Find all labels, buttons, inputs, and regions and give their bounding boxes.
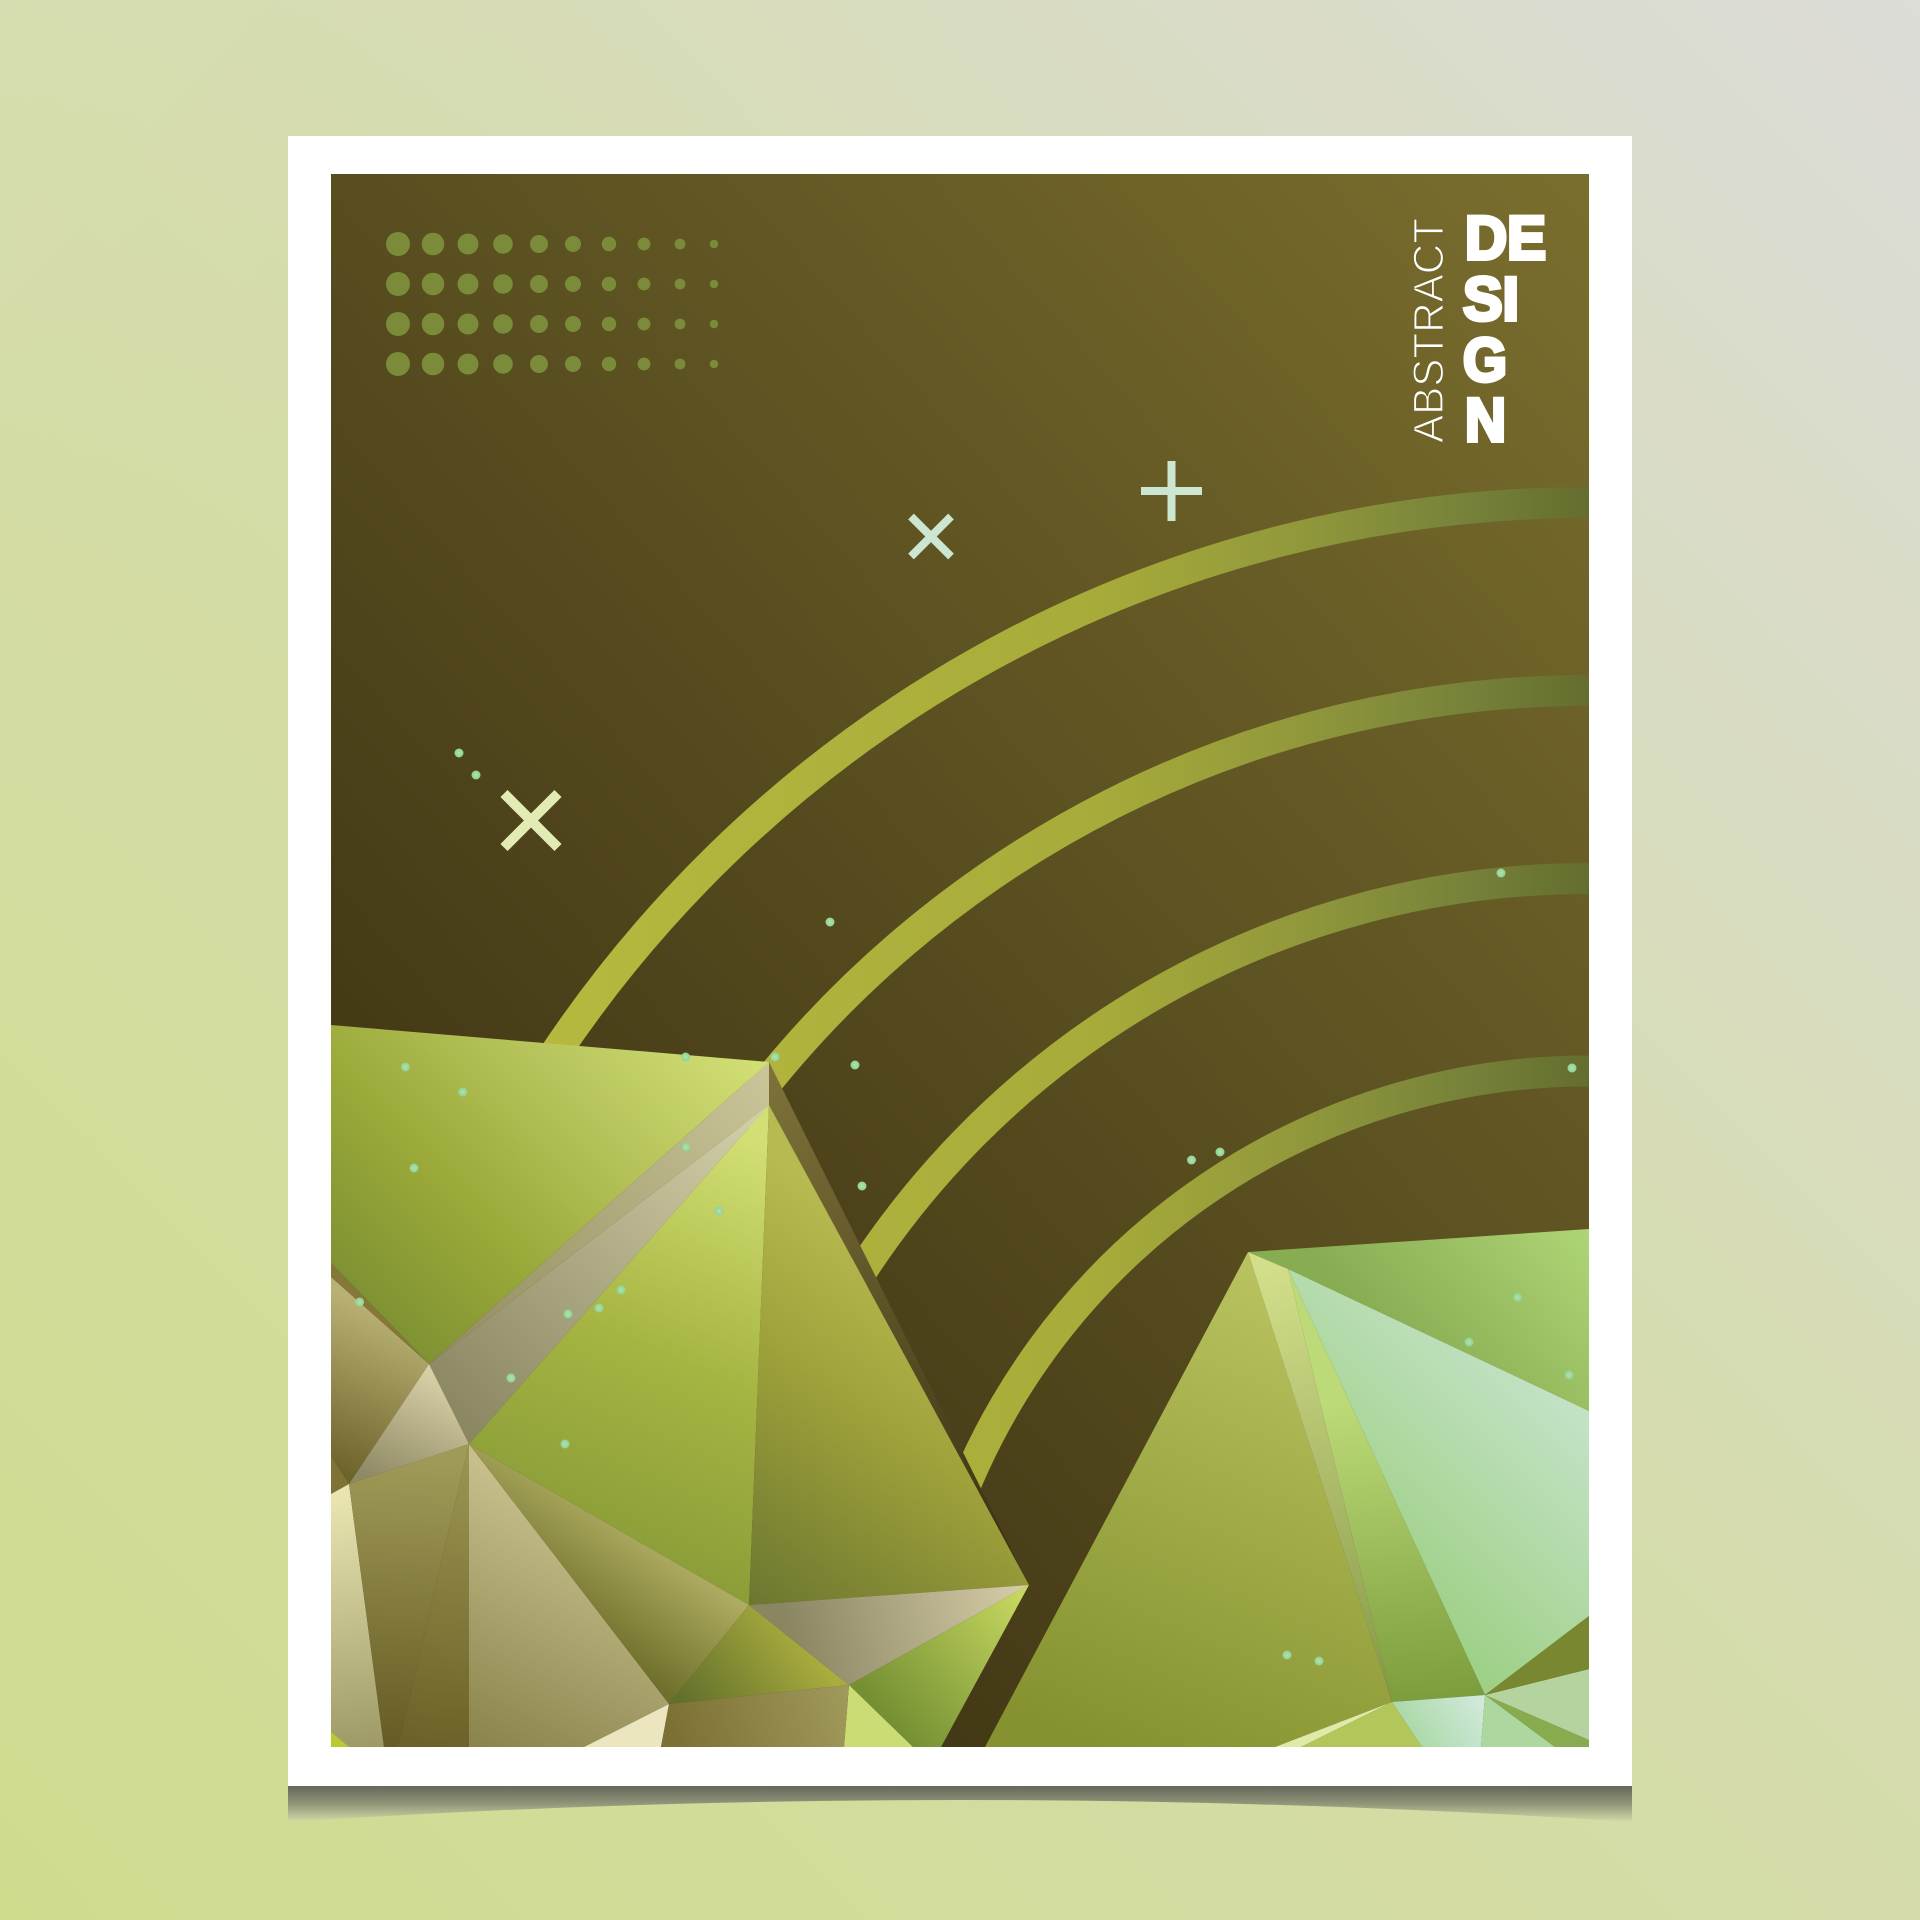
facet: left tan plane xyxy=(331,1277,429,1484)
text: design: G xyxy=(1463,326,1507,394)
facet: brown plane xyxy=(349,1444,469,1747)
facet: top left plane xyxy=(331,1025,769,1364)
facet: tan strip xyxy=(1248,1252,1392,1702)
title: abstract design xyxy=(1406,204,1546,454)
text: abstract: ABSTRACT xyxy=(1406,218,1453,443)
facet: top green plane xyxy=(1248,1229,1589,1411)
facet: big olive plane xyxy=(985,1252,1392,1747)
facet: left edge strip xyxy=(331,1263,429,1364)
facet: cream sliver xyxy=(1275,1702,1392,1747)
facet: pyramid shadow edge xyxy=(769,1062,1029,1585)
facet: large tan plane xyxy=(469,1444,669,1747)
icon: plus sign xyxy=(1141,461,1202,521)
facet: pale band upper xyxy=(429,1062,769,1364)
facet: mint plane xyxy=(1288,1269,1589,1695)
facet: olive corner xyxy=(1485,1616,1589,1695)
facet: cream plane xyxy=(331,1484,384,1747)
facet: bright green plane xyxy=(849,1585,1029,1747)
concentric arcs xyxy=(526,502,1589,1530)
facet: pale band lower xyxy=(429,1105,769,1444)
poster panel background xyxy=(331,174,1589,1747)
facet: pyramid right xyxy=(749,1105,1029,1605)
facet: grey triangle xyxy=(749,1585,1029,1685)
facet: lime triangle xyxy=(844,1685,913,1747)
text: design: DE xyxy=(1465,204,1546,272)
facet: green stripe xyxy=(1485,1695,1589,1747)
facet: cream triangle xyxy=(584,1704,669,1747)
facet: olive plane xyxy=(469,1444,749,1704)
facet: lime base xyxy=(1301,1702,1422,1747)
icon: large cross xyxy=(504,794,558,848)
poster shadow xyxy=(288,1785,1632,1822)
right mountain xyxy=(985,1229,1589,1747)
scattered small dots xyxy=(355,748,1577,1666)
facet: brown base xyxy=(661,1685,849,1747)
facet: light triangle xyxy=(349,1364,469,1484)
facet: green strip xyxy=(1288,1269,1485,1702)
icon: small cross xyxy=(911,516,951,556)
facet: mint base xyxy=(1481,1695,1555,1747)
poster white frame xyxy=(288,136,1632,1786)
facet: pyramid left xyxy=(469,1105,769,1605)
facet: pale mint base xyxy=(1392,1695,1485,1747)
facet: corner lime xyxy=(331,1732,349,1747)
facet: pale plane xyxy=(1485,1669,1589,1740)
left mountain xyxy=(331,1025,1029,1747)
halftone dot grid xyxy=(386,232,718,376)
facet: small dark triangle xyxy=(331,1456,349,1494)
text: design: SI xyxy=(1463,265,1519,333)
facet: brown sliver xyxy=(398,1444,469,1747)
facet: green triangle xyxy=(669,1605,849,1704)
text: design: N xyxy=(1465,386,1506,454)
text: design xyxy=(1463,204,1546,454)
